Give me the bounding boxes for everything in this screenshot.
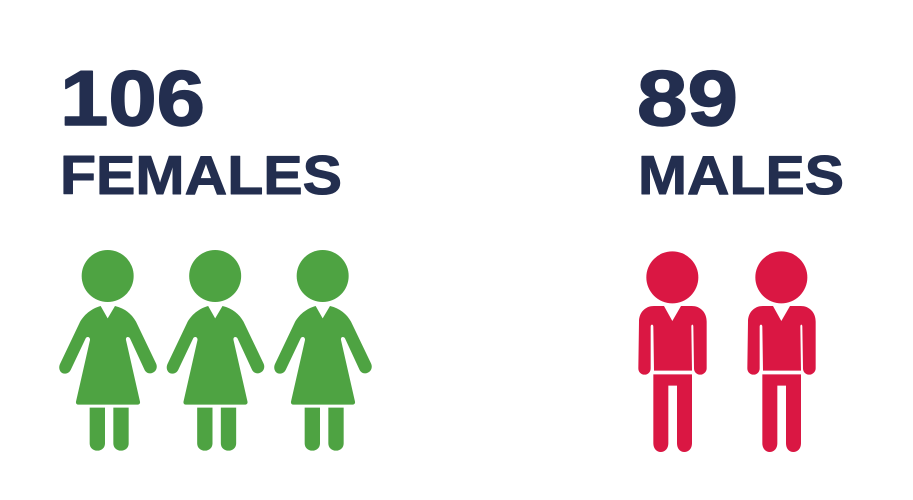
icon: female figure 3 [274, 250, 372, 451]
icon: female figure 1 [59, 250, 157, 451]
males label: MALES [638, 144, 844, 206]
females label: FEMALES [60, 144, 342, 206]
females count: 106 [60, 54, 205, 142]
males count: 89 [637, 54, 738, 142]
icon: female figure 2 [167, 250, 264, 451]
icon: male figure 2 [747, 251, 816, 452]
icon: male figure 1 [638, 251, 707, 452]
